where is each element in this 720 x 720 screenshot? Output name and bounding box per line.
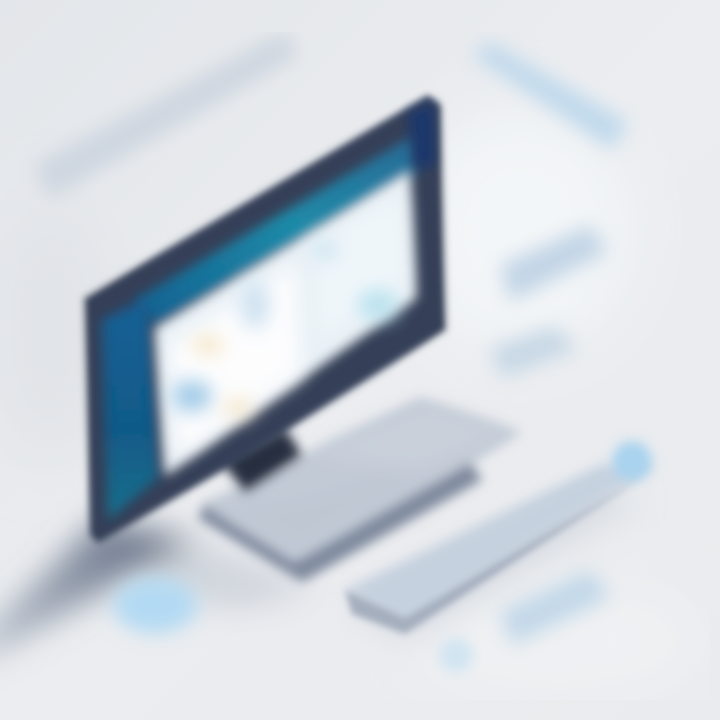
icon: blue dot on tablet (612, 441, 652, 481)
text placeholder: top left (35, 32, 298, 198)
monitor stand (222, 428, 302, 492)
panel: tablet device (345, 465, 655, 634)
monitor left band (102, 298, 158, 520)
monitor top right dark corner (408, 102, 436, 170)
panel: keyboard base (198, 398, 522, 582)
panel: monitor (84, 95, 446, 543)
screen colored details (172, 239, 398, 417)
screen bright panels (170, 195, 405, 455)
floor shadow (0, 490, 640, 660)
monitor top bezel band (135, 135, 416, 325)
icon: blue blob lower left (113, 577, 197, 633)
text placeholder: bottom right (500, 570, 610, 645)
text placeholder: top right (472, 42, 628, 150)
monitor frame (84, 95, 446, 543)
monitor screen (155, 170, 416, 476)
text placeholder: right middle upper (500, 225, 608, 302)
icon: blue dot bottom (439, 638, 473, 672)
text placeholder: right middle lower (490, 326, 578, 378)
